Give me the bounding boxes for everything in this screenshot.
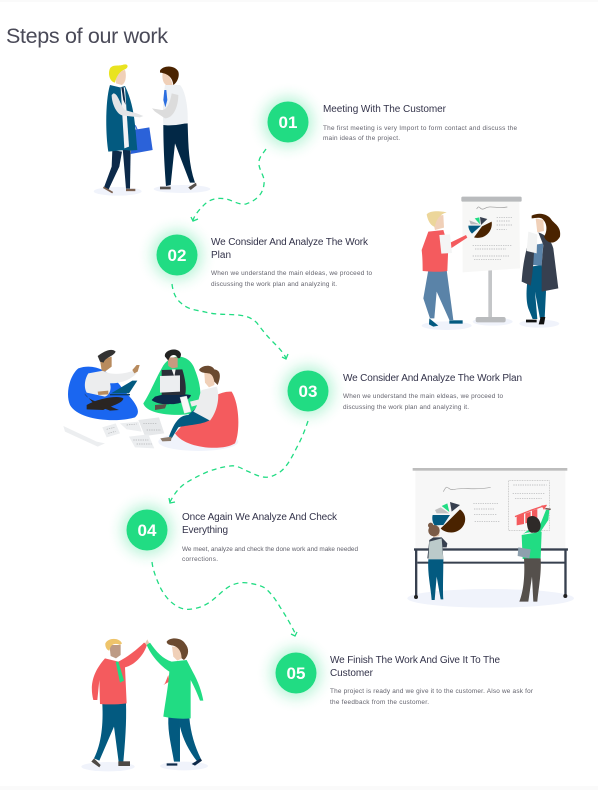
illustration: flip chart presentation xyxy=(422,197,560,330)
step 5: text block: The project is ready and we give it to the customer. Also we ask for xyxy=(330,688,534,695)
step 1: text block: The first meeting is very Import to form contact and discuss the xyxy=(323,125,517,132)
connector: step 3 to step 4 xyxy=(169,421,308,503)
title: Steps of our work xyxy=(6,24,168,48)
step 4: text block: corrections. xyxy=(182,556,218,563)
step 2: badge: 02 xyxy=(168,246,186,265)
step 2: text block: We Consider And Analyze The Work xyxy=(211,237,369,248)
step 3: text block: When we understand the main eldeas, we proceed to xyxy=(343,393,503,400)
step 1: text block xyxy=(323,104,517,142)
step 4: badge: 04 xyxy=(138,521,157,540)
step 4: text block: Everything xyxy=(182,525,228,536)
step 1: badge: 01 xyxy=(279,113,297,132)
step 3: badge: 03 xyxy=(299,382,317,401)
step 3: text block xyxy=(343,373,522,411)
step 2: badge xyxy=(152,230,202,280)
illustration: whiteboard review xyxy=(407,468,574,608)
connector: step 4 to step 5 xyxy=(152,562,297,636)
step 3: badge xyxy=(283,366,333,416)
step 4: text block: We meet, analyze and check the done work and make needed xyxy=(182,546,358,553)
step 4: text block xyxy=(182,512,358,563)
step 5: badge xyxy=(271,648,321,698)
step 1: badge xyxy=(263,97,313,147)
step 2: text block: Plan xyxy=(211,250,231,261)
step 5: text block: the feedback from the customer. xyxy=(330,699,429,706)
step 4: badge xyxy=(122,505,172,555)
illustration: high five xyxy=(81,638,208,771)
step 3: text block: discussing the work plan and analyzing it. xyxy=(343,404,469,411)
illustration: team on bean bags xyxy=(63,350,238,451)
step 2: text block: When we understand the main eldeas, we proceed to xyxy=(211,270,372,277)
step 5: text block: We Finish The Work And Give It To The xyxy=(330,655,500,666)
step 2: text block xyxy=(211,237,372,288)
step 1: text block: Meeting With The Customer xyxy=(323,104,447,115)
step 5: text block xyxy=(330,655,534,706)
illustration: two men meeting xyxy=(94,64,210,196)
connector: step 1 to step 2 xyxy=(191,149,266,221)
step 3: text block: We Consider And Analyze The Work Plan xyxy=(343,373,522,384)
step 5: badge: 05 xyxy=(287,664,305,683)
step 5: text block: Customer xyxy=(330,668,374,679)
step 4: text block: Once Again We Analyze And Check xyxy=(182,512,338,523)
step 1: text block: main ideas of the project. xyxy=(323,135,400,142)
connector: step 2 to step 3 xyxy=(172,284,288,359)
step 2: text block: discussing the work plan and analyzing it. xyxy=(211,281,337,288)
